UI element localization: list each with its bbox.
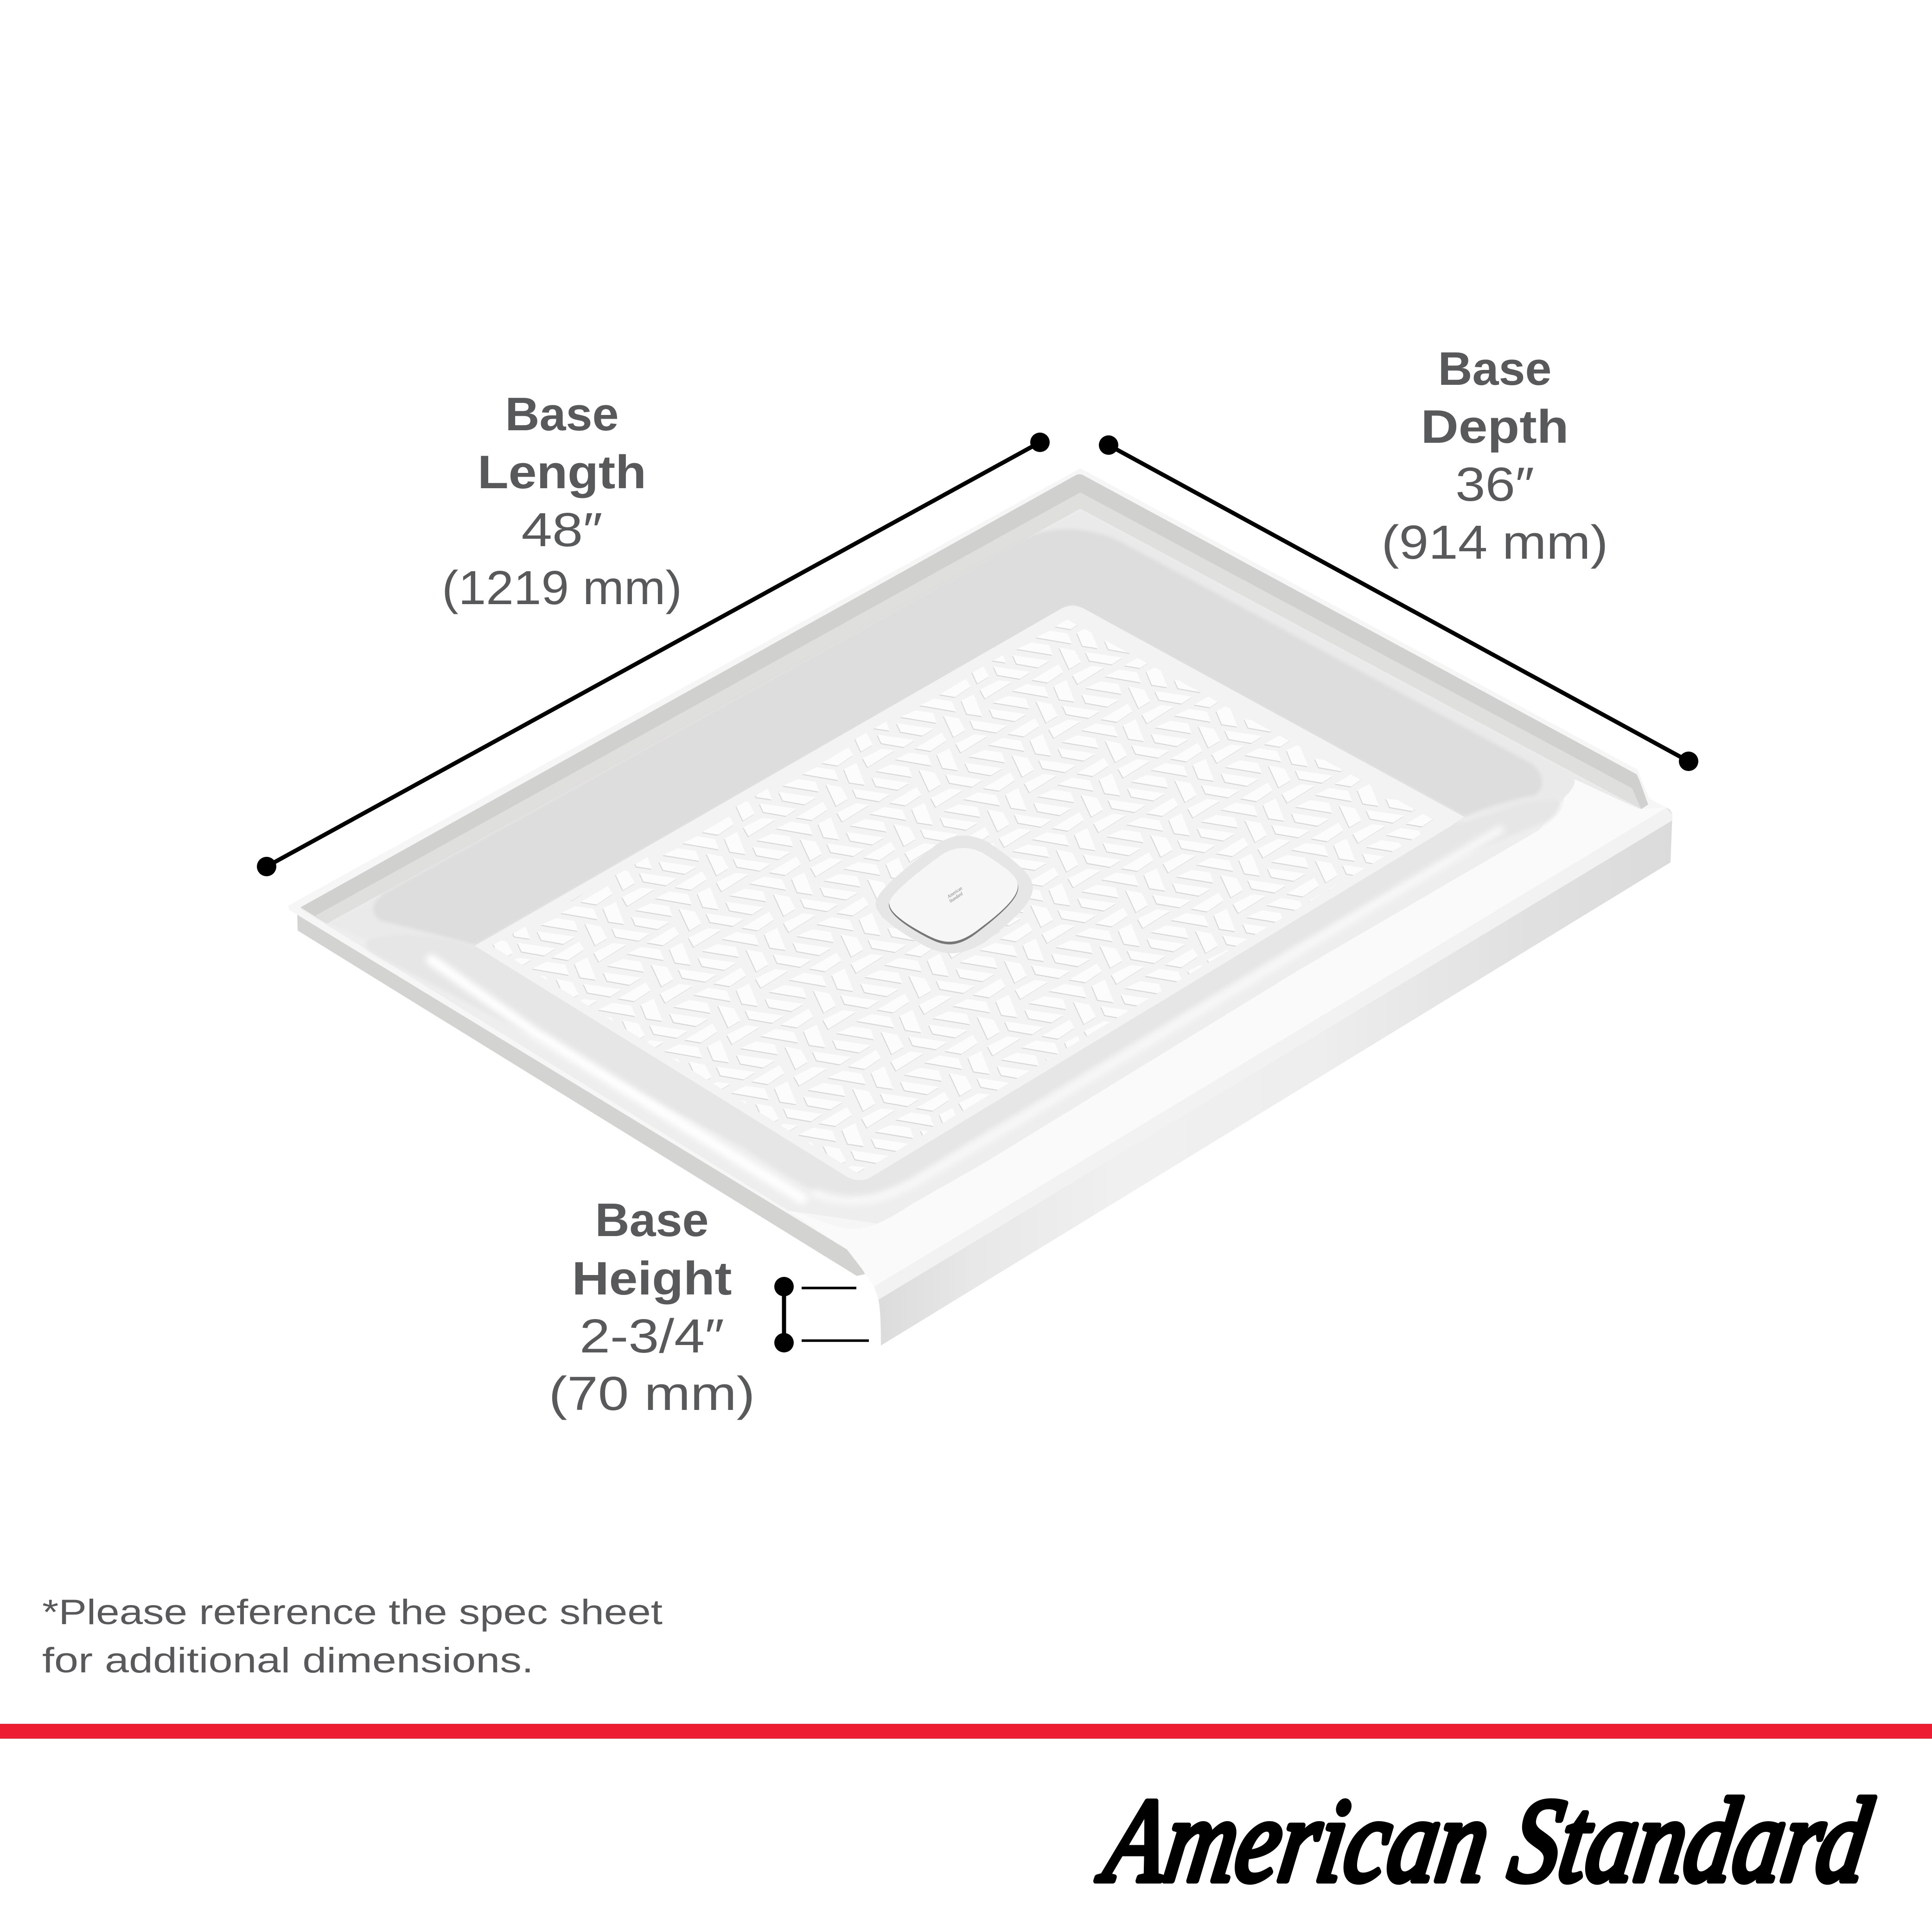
back wall light slope bbox=[327, 509, 1641, 946]
footnote bbox=[42, 1593, 663, 1680]
anti-slip tile pattern bbox=[297, 449, 1698, 1346]
label: base height: (70 mm) bbox=[549, 1367, 755, 1420]
drain recess bbox=[876, 835, 1033, 953]
front apron bbox=[874, 808, 1672, 1345]
footnote: *Please reference the spec sheet bbox=[42, 1593, 663, 1632]
red divider bar bbox=[0, 1724, 1932, 1739]
drain cover shadow edge bbox=[889, 849, 1018, 944]
drain channel shading bbox=[366, 800, 1560, 1199]
dimension line: base length bbox=[257, 433, 1050, 876]
label: base length: Length bbox=[478, 446, 646, 498]
label: base depth: (914 mm) bbox=[1382, 516, 1608, 569]
dimension line: base height bbox=[774, 1277, 869, 1352]
dimension line: base depth bbox=[1099, 435, 1698, 771]
drain cover logo: Standard bbox=[949, 891, 963, 905]
label: base depth: Base bbox=[1438, 343, 1551, 395]
label: base depth: Depth bbox=[1421, 401, 1569, 453]
channel highlights bbox=[431, 830, 1500, 1200]
top rim bbox=[288, 468, 1666, 1287]
back wall darker panel bbox=[373, 529, 1542, 946]
textured floor mat bbox=[475, 606, 1464, 1180]
basin floor bbox=[300, 475, 1648, 1224]
threshold ledge bbox=[788, 779, 1666, 1287]
label: base length: (1219 mm) bbox=[442, 561, 682, 614]
shower base product illustration bbox=[288, 468, 1672, 1345]
label: base depth bbox=[1382, 343, 1608, 569]
drain cover logo: American bbox=[947, 886, 963, 900]
label: base depth: 36″ bbox=[1455, 458, 1534, 511]
label: base height bbox=[549, 1194, 755, 1420]
label: base length: Base bbox=[505, 389, 618, 440]
back wall rim band bbox=[300, 474, 1648, 924]
left skirt of the base bbox=[289, 909, 865, 1276]
label: base height: Base bbox=[595, 1194, 708, 1246]
label: base height: Height bbox=[572, 1253, 732, 1305]
label: base length bbox=[442, 389, 682, 614]
drain bbox=[876, 835, 1033, 953]
label: base height: 2-3/4″ bbox=[580, 1309, 724, 1363]
footnote: for additional dimensions. bbox=[42, 1641, 534, 1680]
label: base length: 48″ bbox=[521, 503, 603, 556]
drain cover bbox=[889, 848, 1018, 942]
